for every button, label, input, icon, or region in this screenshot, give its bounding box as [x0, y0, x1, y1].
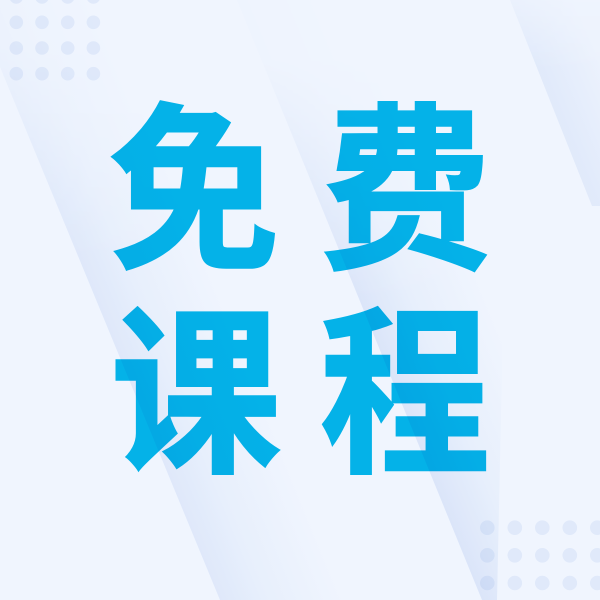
title character 2: 费	[320, 93, 492, 294]
dot grid: bottom right	[480, 520, 600, 590]
title character 1: 免	[108, 93, 279, 294]
title character 3: 课	[110, 296, 282, 497]
dot grid: top left	[10, 0, 100, 80]
title character 4: 程	[319, 296, 490, 497]
title: free courses	[108, 93, 492, 497]
